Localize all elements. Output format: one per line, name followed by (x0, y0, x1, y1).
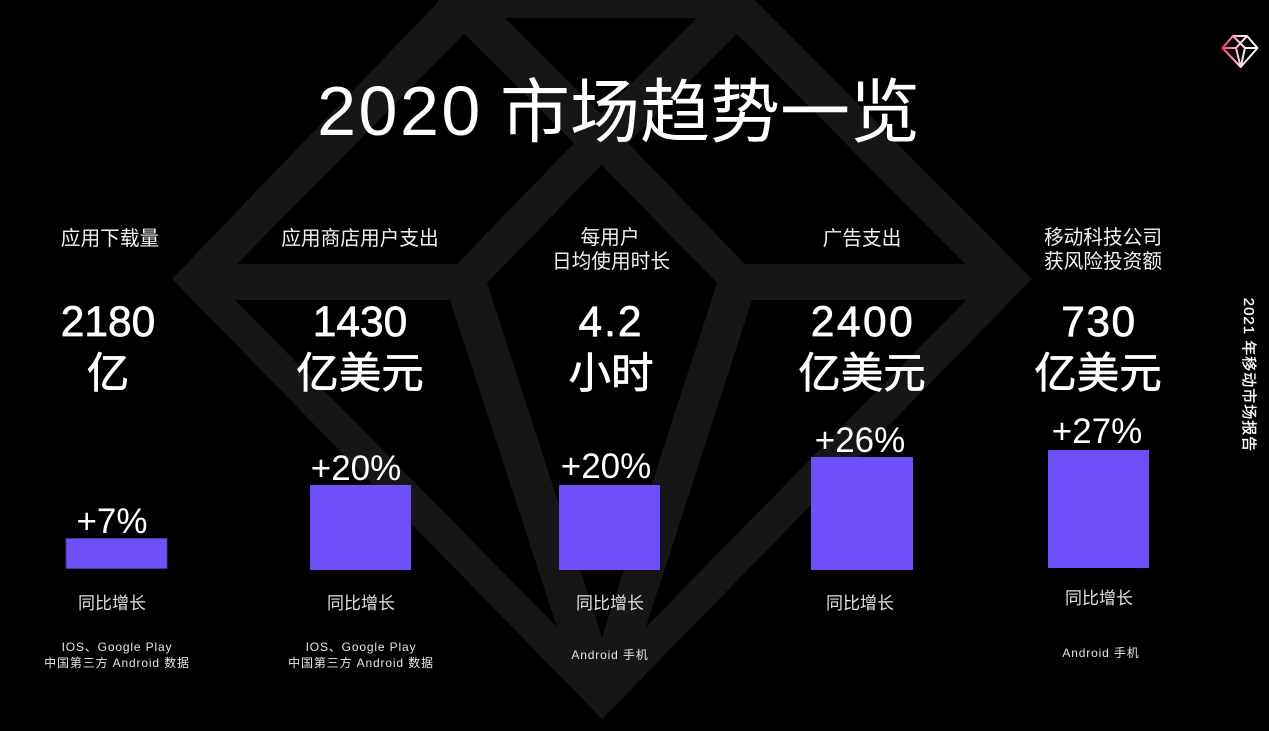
source note: Android 手机 (1062, 646, 1140, 660)
label: ad spend: 广告支出 (823, 228, 901, 250)
side label: 2021 年移动市场报告 (1240, 298, 1257, 452)
label: app downloads: 应用下载量 (61, 228, 159, 250)
label: venture funding: 获风险投资额 (1044, 251, 1162, 273)
growth caption: 同比增长 (1065, 589, 1133, 608)
panel: app downloads (44, 228, 190, 670)
label: venture funding (1044, 227, 1162, 273)
title: 2020 (317, 72, 483, 150)
label: daily usage per user: 每用户 (580, 227, 640, 249)
source note: Android 手机 (571, 648, 649, 662)
source note (288, 640, 434, 670)
unit: 亿 (87, 351, 129, 398)
growth percent: +20% (311, 449, 401, 488)
bar (1048, 450, 1149, 568)
bar (559, 485, 660, 570)
value: 2180: 2180 (61, 299, 155, 346)
source note: IOS、Google Play (306, 640, 416, 654)
bar (66, 538, 167, 568)
unit: 亿美元 (798, 351, 926, 398)
value: 4.2: 4.2 (578, 299, 644, 346)
growth caption: 同比增长 (78, 594, 146, 613)
label: daily usage per user: 日均使用时长 (552, 251, 670, 273)
value: 730: 730 (1061, 299, 1137, 346)
icon: diamond logo (1222, 36, 1258, 67)
value: 2400: 2400 (811, 299, 915, 346)
growth percent: +20% (561, 447, 651, 486)
growth percent: +26% (815, 421, 905, 460)
source note: IOS、Google Play (62, 640, 172, 654)
unit: 亿美元 (1034, 351, 1162, 398)
unit: 亿美元 (296, 351, 424, 398)
panel: app store spend (281, 228, 439, 670)
label: daily usage per user (552, 227, 670, 273)
panel: venture funding (1034, 227, 1162, 660)
value: 1430: 1430 (313, 299, 407, 346)
source note (44, 640, 190, 670)
growth percent: +7% (76, 502, 148, 541)
source note: 中国第三方 Android 数据 (44, 655, 190, 670)
growth percent: +27% (1052, 412, 1142, 451)
title (317, 72, 920, 152)
title: 市场趋势一览 (500, 74, 920, 152)
label: venture funding: 移动科技公司 (1044, 227, 1162, 249)
bar (310, 485, 411, 570)
label: app store spend: 应用商店用户支出 (281, 228, 439, 250)
growth caption: 同比增长 (327, 594, 395, 613)
growth caption: 同比增长 (826, 594, 894, 613)
background diamond watermark (172, 0, 1032, 719)
growth caption: 同比增长 (576, 594, 644, 613)
source note: 中国第三方 Android 数据 (288, 655, 434, 670)
panel: daily usage (552, 227, 670, 662)
panel: ad spend (798, 228, 926, 613)
bar (811, 457, 913, 570)
unit: 小时 (568, 351, 654, 398)
